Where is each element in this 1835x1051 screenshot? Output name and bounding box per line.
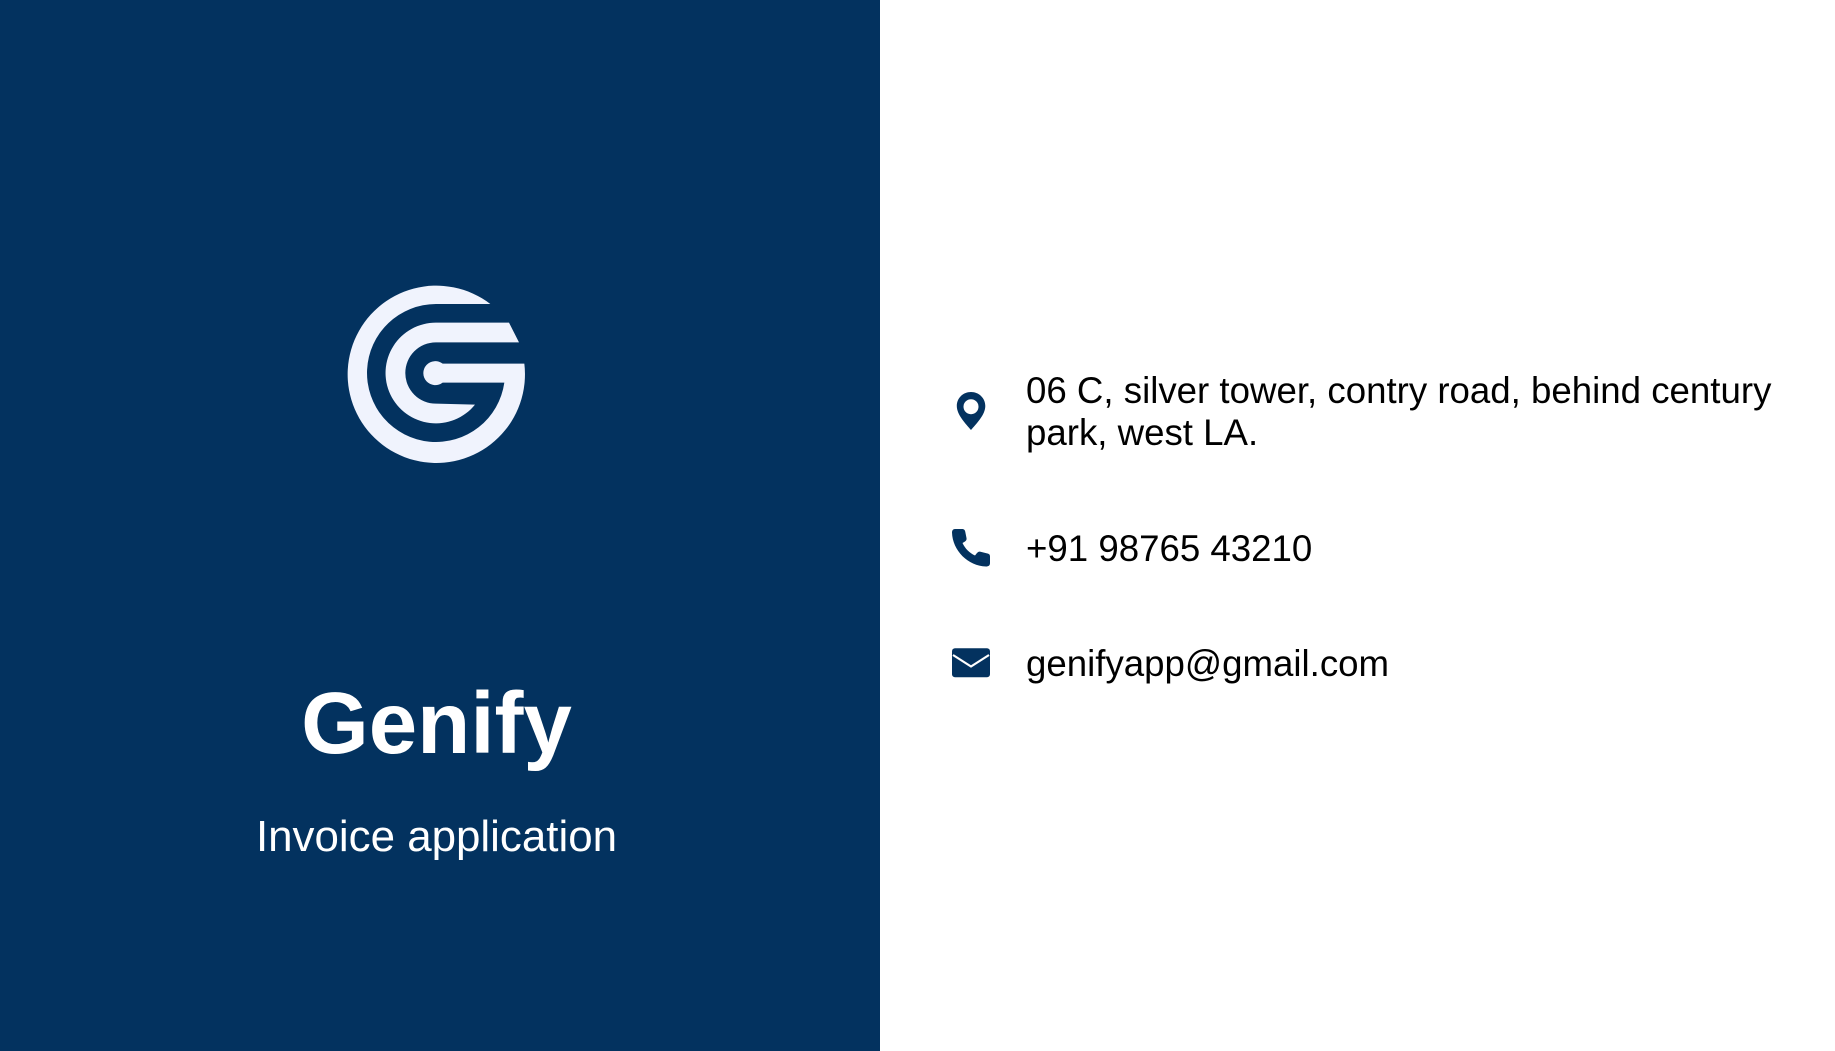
icon: location pin (956, 392, 986, 430)
panel: brand (0, 0, 880, 1051)
phone number text: +91 98765 43210 (1026, 528, 1312, 569)
icon: Genify logo (348, 286, 525, 463)
address text: park, west LA. (1026, 412, 1258, 452)
address text: 06 C, silver tower, contry road, behind century (1026, 370, 1771, 410)
email text: genifyapp@gmail.com (1026, 643, 1389, 684)
icon: phone (952, 529, 990, 566)
title: Genify (301, 674, 572, 772)
address text (1026, 370, 1772, 452)
icon: envelope (952, 648, 990, 678)
subtitle: Invoice application (256, 812, 617, 861)
panel: contact details (880, 0, 1835, 1051)
